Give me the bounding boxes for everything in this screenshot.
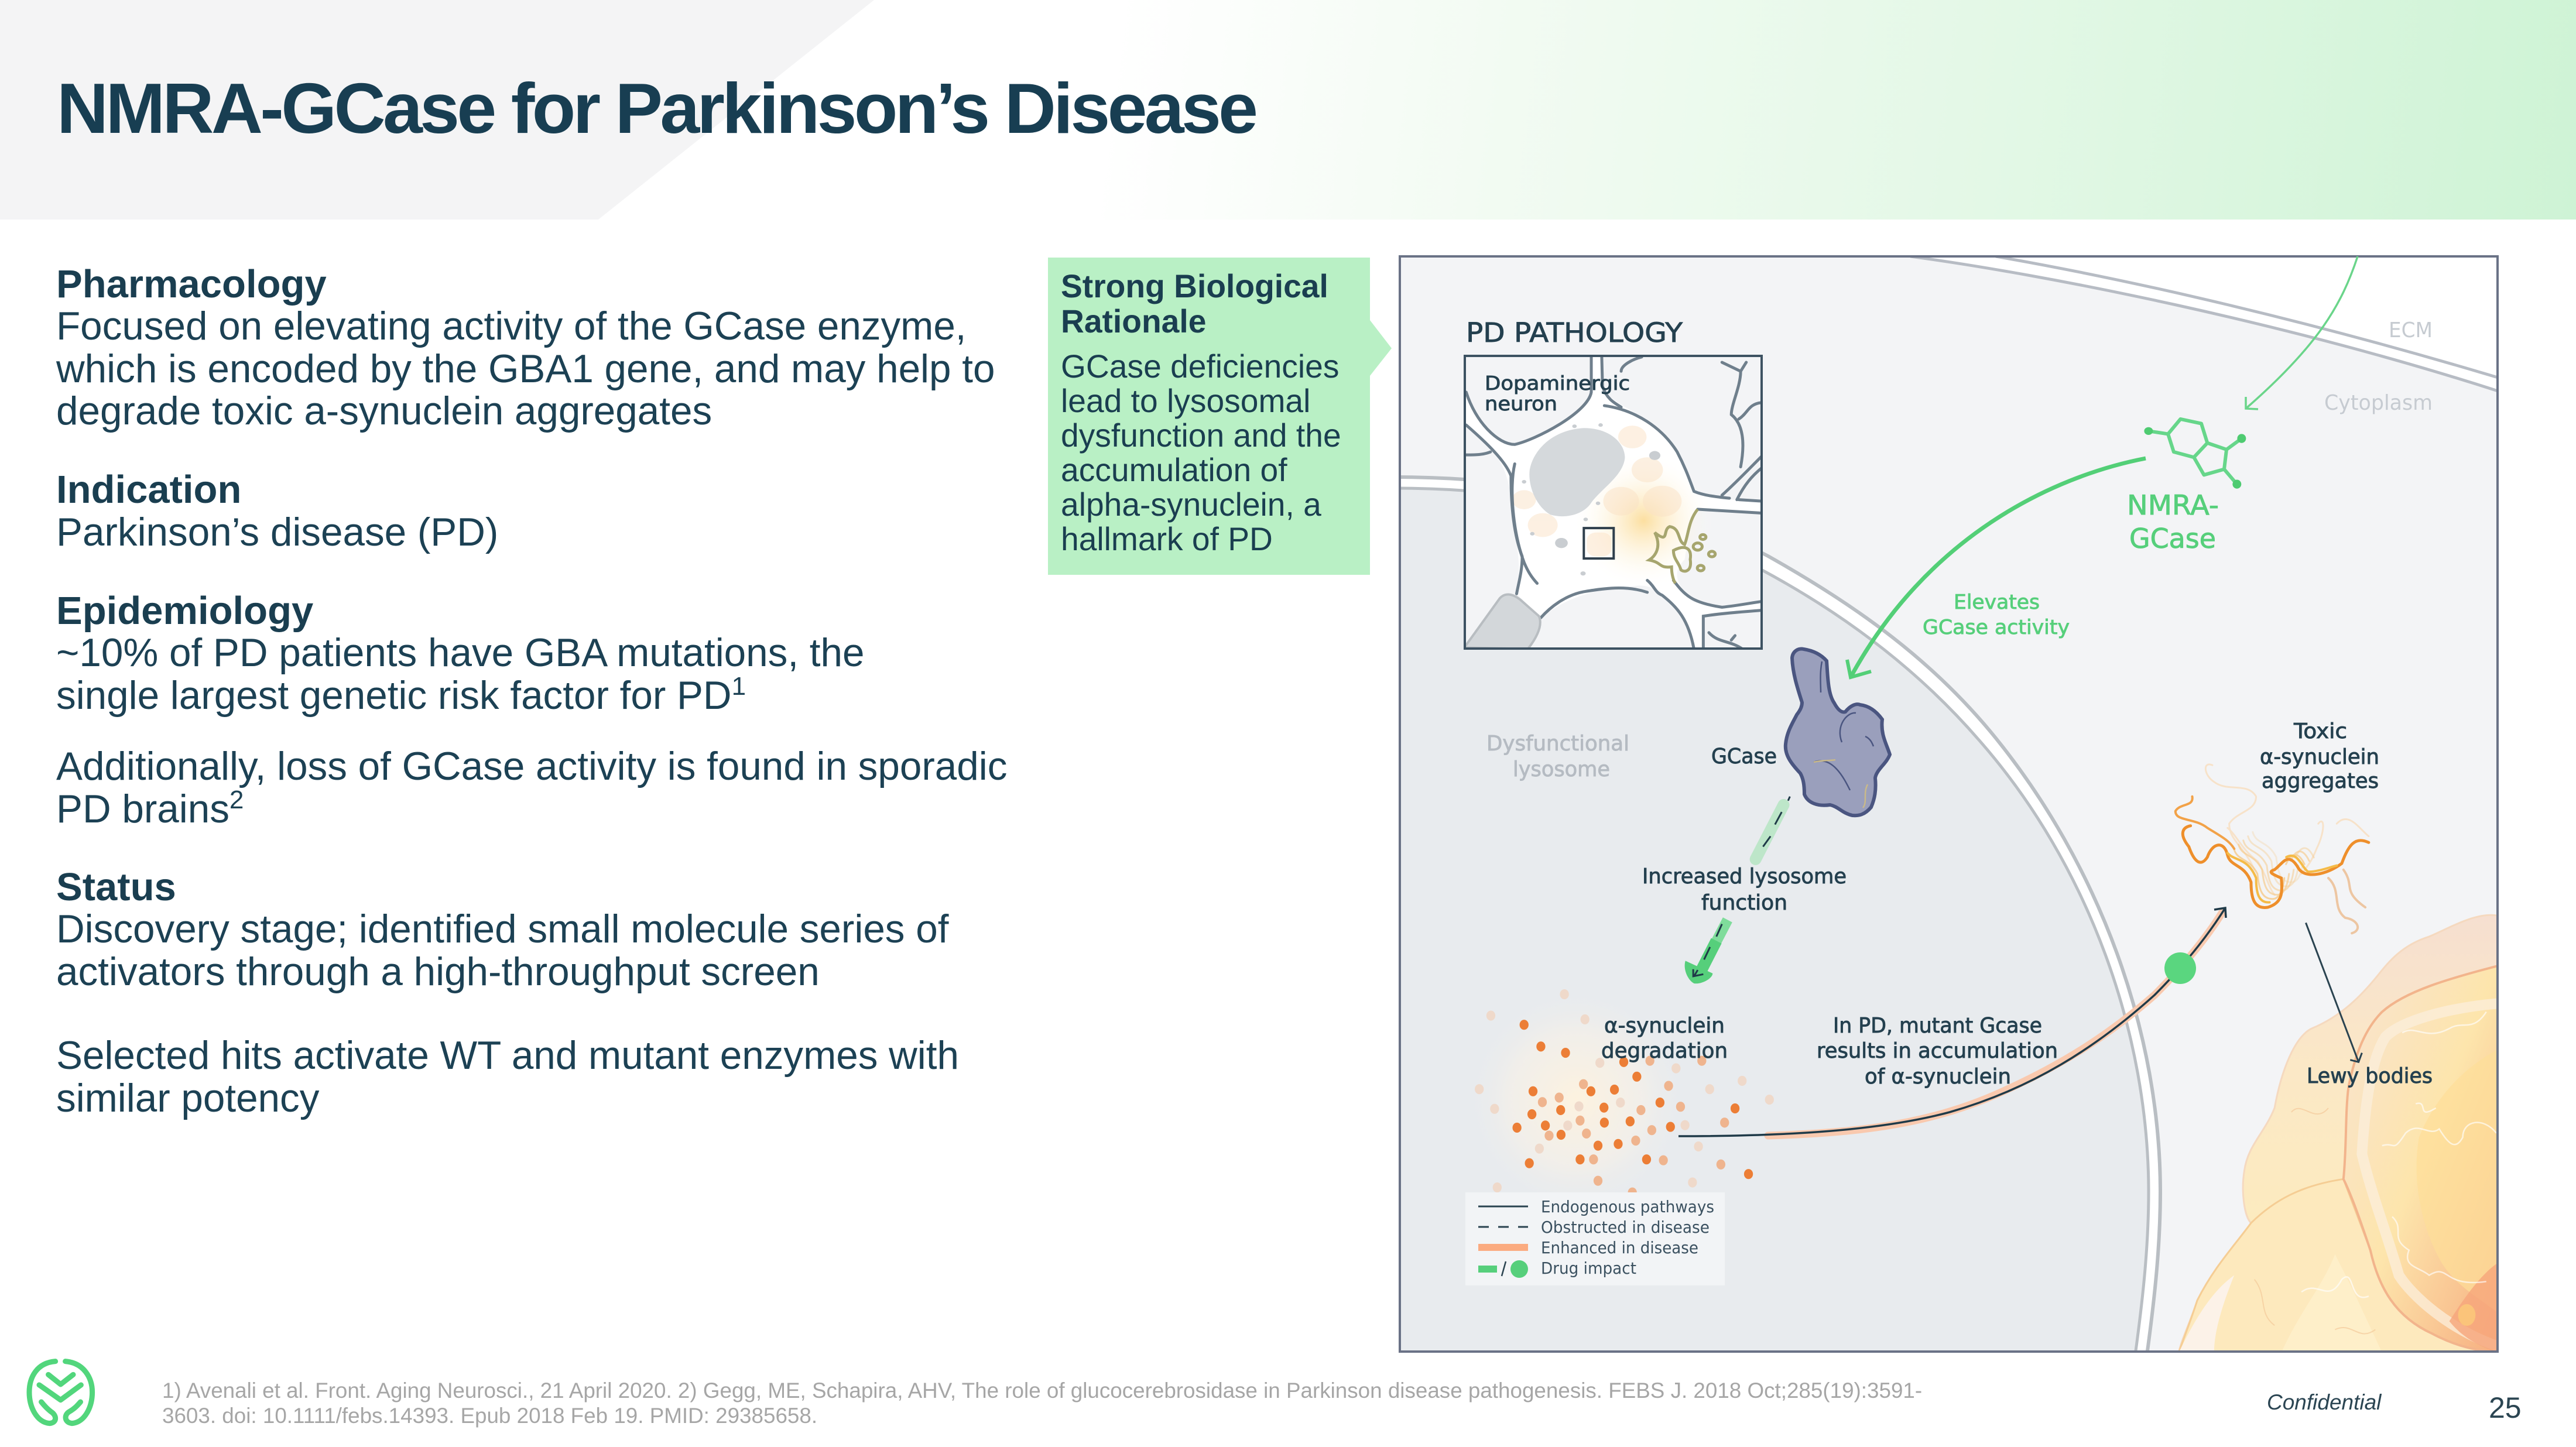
text block: status <box>56 865 959 1120</box>
label: toxic aggregates: α-synuclein <box>2260 745 2379 769</box>
text block: status: similar potency <box>56 1076 320 1120</box>
icon: NMRA-GCase molecule <box>2144 419 2246 489</box>
text block: indication: Parkinson’s disease (PD) <box>56 510 498 554</box>
text block: indication <box>56 468 498 554</box>
text block: epidemiology: 2 <box>229 786 244 814</box>
arrow: GCase to lysosome function <box>1756 797 1790 859</box>
legend <box>1465 1192 1725 1285</box>
legend row: obstructed in disease: Obstructed in disease <box>1541 1218 1710 1237</box>
icon: thin green arrow entering cell <box>2246 256 2358 409</box>
text block: status: Selected hits activate WT and mutant enzymes with <box>56 1034 959 1078</box>
membrane outlines <box>1466 356 1763 649</box>
text block: epidemiology: ~10% of PD patients have GBA mutations, the <box>56 631 864 675</box>
alpha-synuclein degradation particles <box>1464 987 1774 1212</box>
label: toxic aggregates <box>2260 719 2379 793</box>
title: NMRA-GCase for Parkinson’s Disease <box>57 68 1258 148</box>
label: elevates GCase activity: Elevates <box>1954 591 2040 614</box>
text block: epidemiology: single largest genetic risk factor for PD <box>56 674 732 718</box>
label: dopaminergic neuron: neuron <box>1485 392 1557 415</box>
label: NMRA-GCase <box>2127 489 2219 554</box>
text block: pharmacology: Pharmacology <box>56 262 327 306</box>
legend row: enhanced in disease: Enhanced in disease <box>1541 1238 1698 1257</box>
label: GCase: GCase <box>1711 745 1777 769</box>
label: elevates GCase activity: GCase activity <box>1923 616 2070 639</box>
label: Lewy bodies: Lewy bodies <box>2307 1064 2433 1088</box>
callout: strong biological rationale: lead to lysosomal <box>1061 383 1310 419</box>
callout: strong biological rationale: accumulation of <box>1061 452 1287 488</box>
zoom square <box>1584 528 1614 558</box>
arrow: drug to GCase <box>1847 458 2146 677</box>
lysosome <box>1396 477 2160 1355</box>
text block: epidemiology: PD brains <box>56 787 229 831</box>
callout: strong biological rationale: dysfunction and the <box>1061 417 1341 454</box>
icon: GCase enzyme <box>1786 649 1890 815</box>
label: dysfunctional lysosome: Dysfunctional <box>1486 732 1629 756</box>
label: increased lysosome function <box>1642 865 1847 915</box>
neuron cytoplasm colouring <box>1514 423 1693 576</box>
label: NMRA-GCase: NMRA- <box>2127 489 2219 521</box>
logo <box>29 1362 93 1424</box>
extracellular matrix region <box>1910 256 2500 392</box>
icon: toxic alpha-synuclein aggregates <box>2176 764 2369 933</box>
axon terminal cylinder <box>1464 595 1540 649</box>
callout: strong biological rationale: Rationale <box>1061 303 1206 340</box>
footnote: 1) Avenali et al. Front. Aging Neurosci., 21 April 2020. 2) Gegg, ME, Schapira, AHV, The role of glucocerebrosidase in Parkinson disease pathogenesis. FEBS J. 2018 Oct;285(19):3591- <box>162 1379 1922 1403</box>
label: mutant GCase accumulation <box>1817 1014 2058 1089</box>
label: elevates GCase activity <box>1923 591 2070 639</box>
text block: pharmacology: Focused on elevating activity of the GCase enzyme, <box>56 304 967 348</box>
text block: pharmacology: which is encoded by the GBA1 gene, and may help to <box>56 347 995 391</box>
text block: pharmacology: degrade toxic a-synuclein aggregates <box>56 389 712 433</box>
label: alpha-synuclein degradation: α-synuclein <box>1604 1014 1725 1038</box>
label: dysfunctional lysosome <box>1486 732 1629 781</box>
text block: status: Discovery stage; identified small molecule series of <box>56 907 949 951</box>
icon: drug impact dot <box>2164 952 2196 984</box>
neuron body <box>1464 356 1763 649</box>
label: ECM: ECM <box>2389 318 2433 342</box>
callout: strong biological rationale: Strong Biological <box>1061 268 1328 304</box>
text block: indication: Indication <box>56 468 241 512</box>
label: toxic aggregates: aggregates <box>2262 769 2379 793</box>
text block: epidemiology <box>56 589 1007 831</box>
label: cytoplasm: Cytoplasm <box>2324 391 2433 415</box>
callout: strong biological rationale: GCase deficiencies <box>1061 348 1339 385</box>
callout: strong biological rationale <box>1048 258 1392 575</box>
legend row: drug impact <box>1478 1259 1636 1278</box>
label: toxic aggregates: Toxic <box>2293 719 2347 743</box>
text block: status: activators through a high-throughput screen <box>56 950 820 994</box>
inset: dopaminergic neuron <box>1464 356 1763 649</box>
legend row: drug impact: Drug impact <box>1541 1259 1636 1278</box>
callout: strong biological rationale: alpha-synuclein, a <box>1061 486 1321 523</box>
label: dopaminergic neuron: Dopaminergic <box>1485 372 1630 395</box>
label: dopaminergic neuron <box>1485 372 1630 415</box>
toxic aggregate squiggle in neuron <box>1649 509 1715 584</box>
label: dysfunctional lysosome: lysosome <box>1513 757 1610 781</box>
label: mutant GCase accumulation: In PD, mutant Gcase <box>1833 1014 2042 1038</box>
label: NMRA-GCase: GCase <box>2129 523 2216 554</box>
arrow: lysosome function to degradation <box>1685 920 1728 983</box>
confidential mark: Confidential <box>2267 1390 2382 1414</box>
panel: PD pathology illustration <box>1396 256 2500 1355</box>
label: alpha-synuclein degradation <box>1601 1014 1728 1063</box>
label: mutant GCase accumulation: results in accumulation <box>1817 1039 2058 1063</box>
arrow: aggregates to Lewy bodies <box>2306 923 2362 1062</box>
label: increased lysosome function: function <box>1701 891 1787 915</box>
label: mutant GCase accumulation: of α-synuclein <box>1865 1065 2011 1089</box>
arrow: accumulation pathway <box>1678 908 2226 1136</box>
text block: pharmacology <box>56 262 995 433</box>
header band <box>0 0 2576 220</box>
text block: epidemiology: Additionally, loss of GCase activity is found in sporadic <box>56 745 1007 788</box>
text block: epidemiology: 1 <box>732 672 746 701</box>
cell membrane <box>1910 256 2500 392</box>
callout: strong biological rationale: hallmark of PD <box>1061 521 1273 557</box>
footnote: 3603. doi: 10.1111/febs.14393. Epub 2018 Feb 19. PMID: 29385658. <box>162 1404 817 1428</box>
label: alpha-synuclein degradation: degradation <box>1601 1039 1728 1063</box>
page number: 25 <box>2489 1391 2522 1424</box>
text block: status: Status <box>56 865 176 909</box>
legend row: endogenous pathways: Endogenous pathways <box>1541 1197 1714 1216</box>
footnote <box>162 1379 1922 1428</box>
nucleus <box>1529 428 1625 516</box>
text block: epidemiology: Epidemiology <box>56 589 313 633</box>
panel border <box>1400 256 2498 1352</box>
heading: PD PATHOLOGY: PD PATHOLOGY <box>1466 317 1683 348</box>
Lewy body <box>2179 915 2498 1353</box>
label: increased lysosome function: Increased lysosome <box>1642 865 1847 889</box>
